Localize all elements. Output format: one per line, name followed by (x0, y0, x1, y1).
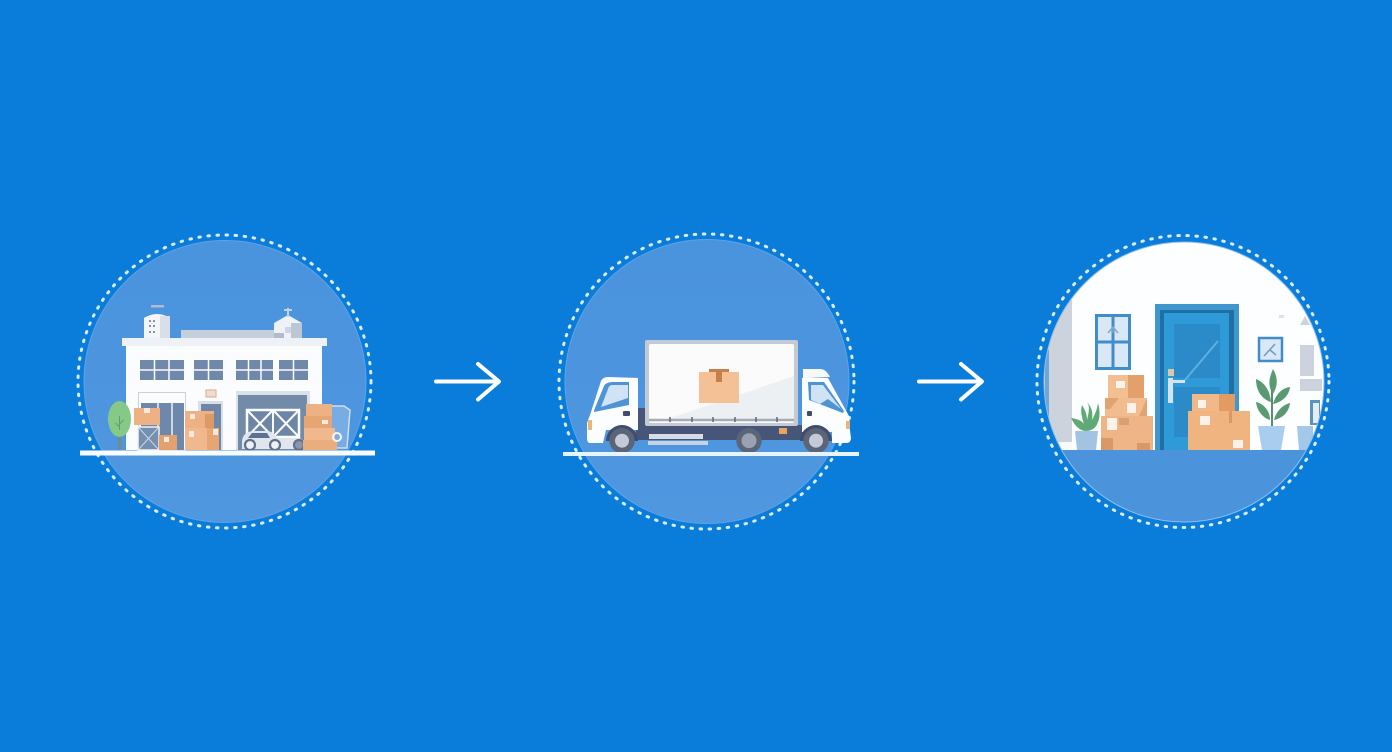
warehouse sign (206, 390, 216, 397)
plant left (1071, 402, 1100, 450)
tall plant right (1256, 369, 1290, 450)
doorstep floor (1062, 450, 1306, 522)
panel: doorstep (1037, 236, 1330, 528)
doorstep dotted ring (1037, 236, 1329, 528)
icon: rooftop tank (144, 305, 170, 338)
boxes center (185, 411, 219, 450)
arrow: truck to doorstep (919, 364, 982, 400)
truck ground line (563, 452, 859, 456)
warehouse middle door (198, 401, 223, 450)
icon: tree (108, 401, 131, 450)
truck right cab (802, 369, 851, 443)
panel: warehouse (78, 235, 375, 528)
warehouse ground line (80, 450, 375, 456)
wall picture (1259, 338, 1282, 361)
truck cargo box (645, 340, 798, 426)
arrow: warehouse to truck (436, 364, 499, 400)
right wall details (1279, 315, 1322, 391)
hand truck (332, 406, 350, 448)
icon: package on truck (699, 369, 739, 403)
warehouse dotted ring (78, 235, 371, 528)
truck chassis (636, 408, 804, 445)
stack of boxes left (1101, 375, 1153, 450)
warehouse loading bay (236, 391, 310, 450)
boxes right of door (1188, 394, 1250, 450)
window (1095, 314, 1131, 370)
doorstep wall (1071, 242, 1324, 450)
truck disc (565, 240, 849, 524)
left wall column (1044, 300, 1072, 442)
truck wheels (606, 425, 832, 453)
right small plant (1297, 400, 1320, 450)
icon: forklift vehicle (242, 431, 304, 450)
boxes left (134, 408, 177, 450)
truck dotted ring (559, 234, 854, 529)
warehouse roof (122, 330, 327, 348)
panel: truck (559, 234, 859, 529)
warehouse disc (84, 240, 366, 522)
boxes right (303, 404, 341, 450)
warehouse left entrance (138, 392, 186, 450)
icon: rooftop vent (274, 308, 302, 338)
infographic: warehouse to truck to doorstep (76, 232, 1330, 530)
blue door (1155, 304, 1239, 450)
doorstep scene (1040, 240, 1330, 525)
warehouse building (126, 346, 322, 450)
warehouse windows (140, 360, 308, 380)
truck left cab (587, 377, 638, 443)
doorstep disc edge (1044, 242, 1324, 522)
